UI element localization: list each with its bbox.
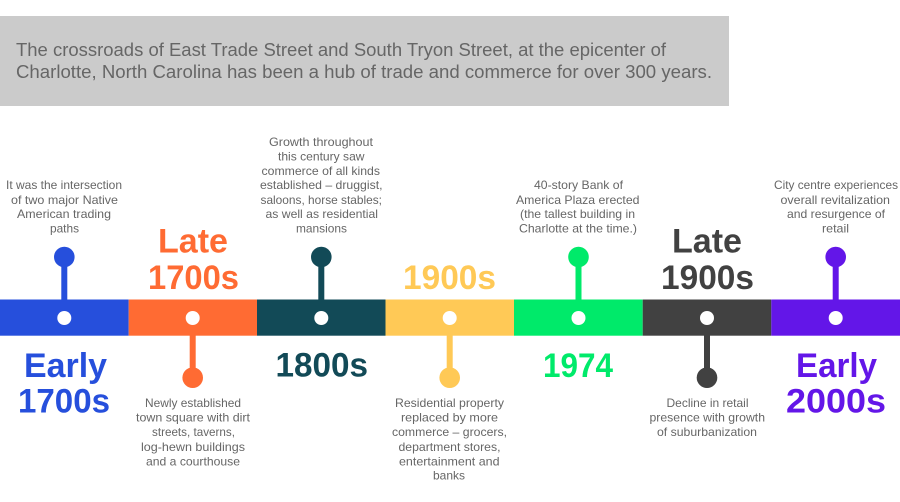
description: and a courthouse	[146, 454, 240, 468]
description: overall revitalization	[780, 193, 890, 207]
description: established – druggist,	[260, 178, 382, 192]
description: and resurgence of	[787, 207, 886, 221]
bar segment	[771, 300, 900, 336]
description: banks	[433, 468, 465, 482]
heading: 1700s	[18, 383, 110, 421]
marker pin	[311, 247, 332, 325]
description	[136, 396, 251, 468]
milestone: Early 1700s	[0, 178, 129, 421]
milestone: Late 1700s	[129, 223, 257, 468]
bar segment	[129, 300, 257, 336]
description	[392, 396, 507, 482]
description: Growth throughout	[269, 135, 374, 149]
heading: Late	[158, 223, 228, 261]
milestone: 1900s	[386, 259, 514, 482]
milestone: 1800s	[257, 135, 386, 385]
heading	[661, 223, 754, 297]
description	[516, 178, 640, 236]
description: of two major Native	[11, 193, 118, 207]
description: 40-story Bank of	[534, 178, 624, 192]
description: commerce – grocers,	[392, 425, 507, 439]
milestone: Late 1900s	[643, 223, 771, 439]
description: retail	[822, 222, 849, 236]
marker pin	[54, 247, 75, 325]
description	[650, 396, 765, 439]
description: log-hewn buildings	[141, 440, 245, 454]
bar segment	[0, 300, 129, 336]
description: Charlotte at the time.)	[519, 222, 637, 236]
description: town square with dirt	[136, 411, 251, 425]
description: of suburbanization	[657, 425, 757, 439]
description: mansions	[296, 222, 347, 236]
description: Newly established	[145, 396, 241, 410]
heading	[18, 347, 110, 421]
description: saloons, horse stables;	[260, 193, 382, 207]
description: American trading	[17, 207, 111, 221]
heading: Late	[672, 223, 742, 261]
description: streets, taverns,	[152, 425, 235, 439]
bar segment	[643, 300, 771, 336]
heading: 2000s	[786, 383, 886, 421]
marker pin	[568, 247, 589, 325]
intro text: The crossroads of East Trade Street and South Tryon Street, at the epicenter of	[16, 40, 667, 60]
description: replaced by more	[401, 411, 498, 425]
description: Decline in retail	[666, 396, 748, 410]
marker pin	[182, 311, 203, 388]
description: paths	[50, 222, 79, 236]
marker pin	[825, 247, 846, 325]
heading	[786, 347, 886, 421]
description	[6, 178, 122, 236]
intro panel	[0, 16, 729, 106]
description: as well as residential	[266, 207, 378, 221]
description: It was the intersection	[6, 178, 122, 192]
heading: 1700s	[148, 259, 239, 297]
description	[774, 178, 898, 236]
heading: 1974	[543, 347, 613, 385]
heading: Early	[24, 347, 107, 385]
intro text	[16, 40, 712, 82]
bar segment	[386, 300, 514, 336]
milestone: 1974	[514, 178, 643, 385]
description: Residential property	[395, 396, 504, 410]
marker pin	[439, 311, 460, 388]
heading: 1900s	[661, 259, 754, 297]
bar segment	[257, 300, 386, 336]
heading: 1900s	[403, 259, 496, 297]
description: presence with growth	[650, 411, 765, 425]
description	[260, 135, 382, 236]
heading: 1800s	[276, 347, 368, 385]
marker pin	[697, 311, 717, 388]
description: department stores,	[398, 440, 500, 454]
description: City centre experiences	[774, 178, 898, 192]
heading	[148, 223, 239, 297]
description: this century saw	[278, 150, 365, 164]
description: America Plaza erected	[516, 193, 640, 207]
description: entertainment and	[399, 454, 500, 468]
bar segment	[514, 300, 643, 336]
milestone: Early 2000s	[771, 178, 900, 421]
heading: Early	[796, 347, 877, 385]
intro text: Charlotte, North Carolina has been a hub of trade and commerce for over 300 years.	[16, 62, 712, 82]
description: (the tallest building in	[520, 207, 635, 221]
description: commerce of all kinds	[262, 164, 380, 178]
